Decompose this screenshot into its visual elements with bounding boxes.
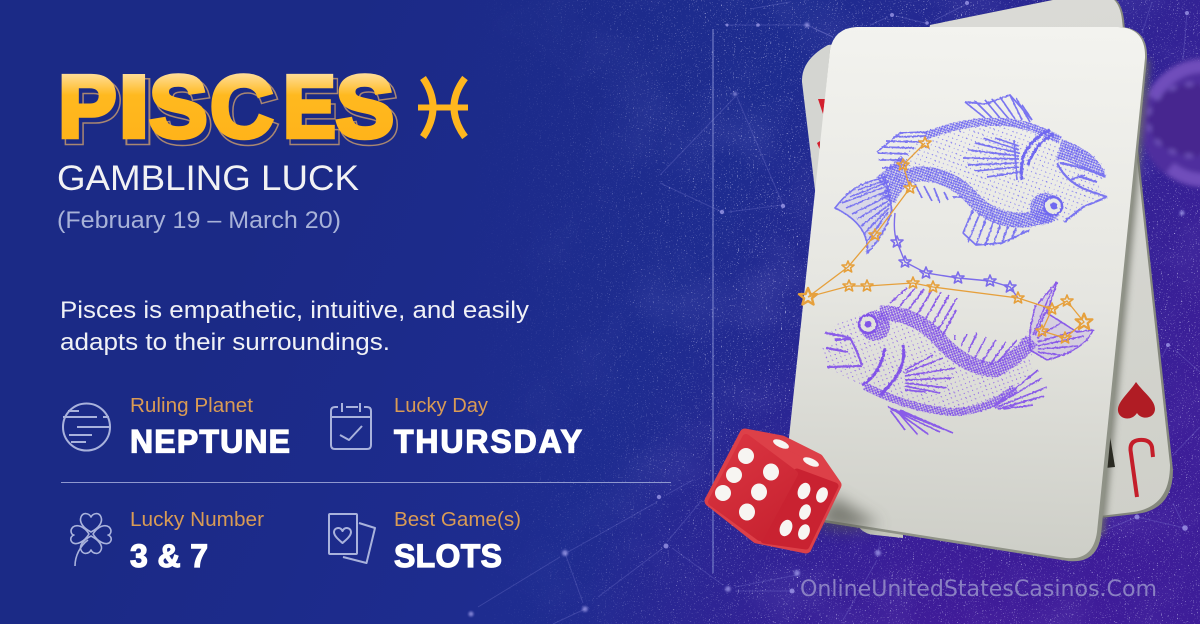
body — [823, 305, 1033, 415]
jack letter — [1130, 440, 1153, 497]
constellation: Pisces orange stars — [799, 137, 1092, 343]
subtitle: GAMBLING LUCK — [57, 158, 359, 198]
back card lower corner — [853, 515, 903, 538]
tail connection shading — [880, 160, 905, 182]
title: PISCES: SC — [149, 57, 274, 156]
illustration: lower fish — [823, 282, 1093, 435]
dorsal fin — [890, 288, 957, 335]
stat: ruling planet — [130, 395, 290, 460]
gill — [1021, 130, 1054, 180]
stat: lucky day: Lucky Day — [394, 395, 488, 417]
mouth — [825, 333, 862, 367]
background — [382, 0, 1200, 624]
description text — [60, 297, 529, 356]
illustration: upper fish — [835, 95, 1107, 253]
playing cards — [781, 0, 1173, 561]
belly shading — [888, 174, 1052, 220]
eye — [1044, 197, 1062, 215]
card edge shadow — [1093, 60, 1150, 535]
rear dorsal fin — [877, 132, 927, 168]
anal fin — [915, 184, 962, 203]
title: PISCES: E — [287, 62, 340, 161]
front card face — [781, 27, 1145, 558]
tail — [1030, 282, 1093, 360]
rear lower fin — [993, 370, 1047, 409]
gill — [862, 345, 904, 395]
back shading — [925, 122, 1060, 140]
pectoral fin — [963, 138, 1020, 180]
title: PISCES — [58, 57, 398, 161]
eye surround — [1030, 193, 1060, 223]
body — [880, 118, 1107, 228]
stat: lucky number — [130, 509, 264, 574]
title: PISCES: I — [122, 63, 154, 161]
mouth — [1057, 163, 1107, 222]
title: PISCES: E — [287, 62, 340, 161]
stat: lucky day — [394, 395, 582, 460]
title: PISCES: SC — [153, 62, 278, 161]
decorative divider: vertical rule — [712, 29, 714, 573]
stat: lucky number: Lucky Number — [130, 509, 264, 531]
tail — [835, 177, 892, 253]
icon: playing cards — [329, 514, 375, 563]
title: PISCES: E — [283, 57, 336, 156]
title: PISCES: P — [62, 62, 121, 161]
description text: Pisces is empathetic, intuitive, and easily — [60, 297, 529, 324]
title: PISCES: SC — [153, 62, 278, 161]
title: PISCES: I — [118, 58, 150, 156]
title: PISCES: S — [340, 62, 398, 161]
description text: adapts to their surroundings. — [60, 329, 390, 356]
icon: red die — [710, 434, 836, 548]
stat: best games: SLOTS — [394, 538, 502, 574]
icon: Pisces zodiac glyph — [418, 78, 468, 137]
stat: best games: Best Game(s) — [394, 509, 521, 531]
title: PISCES: I — [122, 63, 154, 161]
date range: (February 19 – March 20) — [57, 207, 341, 234]
stat: lucky day: THURSDAY — [394, 424, 582, 460]
icon: planet — [63, 404, 110, 450]
constellation lines in background — [468, 1, 1200, 624]
eye — [859, 315, 877, 333]
title: PISCES: P — [62, 62, 121, 161]
stat: ruling planet: NEPTUNE — [130, 424, 290, 460]
icon: calendar — [331, 403, 371, 449]
red suit marks — [817, 99, 825, 150]
dice shadow on card — [815, 495, 880, 530]
front card edge — [783, 27, 1147, 561]
dorsal fin — [965, 95, 1032, 122]
belly shading — [865, 386, 1015, 412]
head — [1056, 140, 1106, 176]
back card with jack — [900, 0, 1173, 535]
divider — [61, 482, 671, 484]
watermark: OnlineUnitedStatesCasinos.Com — [800, 577, 1157, 602]
pectoral fin — [905, 355, 955, 393]
back shading — [880, 313, 1032, 370]
jack picture frame — [1105, 424, 1115, 468]
second dorsal fin — [955, 333, 1017, 365]
back card left — [802, 42, 903, 538]
ventral fin — [888, 407, 953, 435]
icon: blurred poker chip — [1140, 58, 1200, 188]
lower fin — [963, 210, 1030, 246]
stat: best games — [394, 509, 521, 574]
icon: four-leaf clover — [71, 514, 111, 566]
constellation: Pisces purple arc — [891, 213, 1018, 298]
title: PISCES: S — [336, 57, 394, 156]
icon: heart pip — [1118, 382, 1155, 419]
eye surround — [860, 311, 890, 341]
title: PISCES: S — [340, 62, 398, 161]
stat: lucky number: 3 & 7 — [130, 538, 208, 574]
stat: ruling planet: Ruling Planet — [130, 395, 253, 417]
title: PISCES: P — [58, 57, 117, 156]
